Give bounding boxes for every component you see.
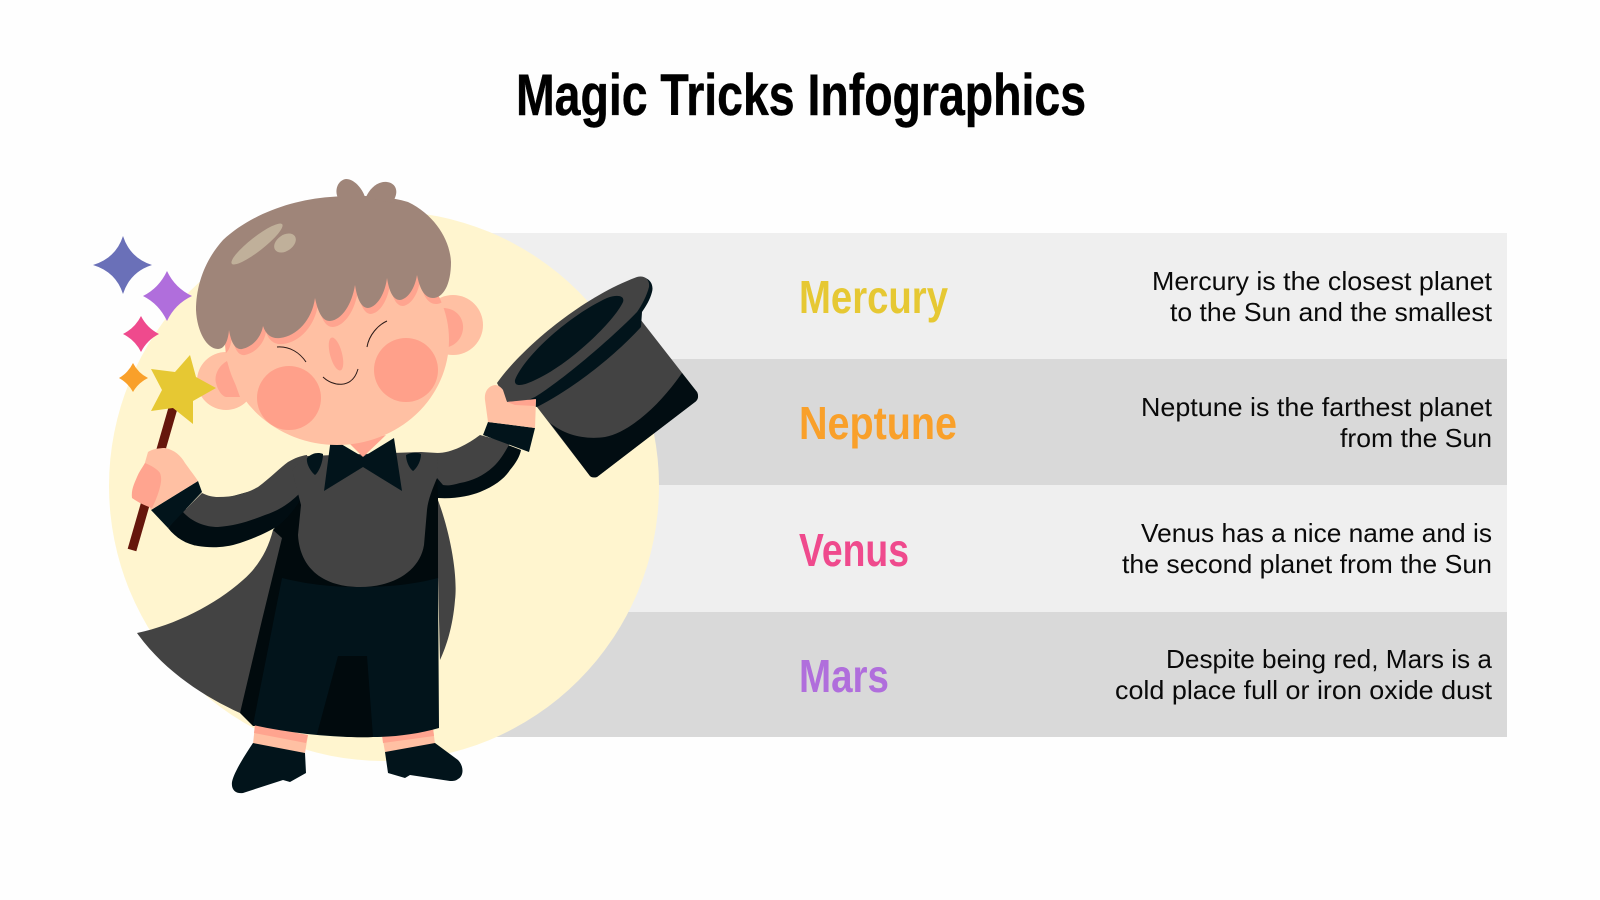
eyes and mouth: [277, 321, 387, 384]
top hat: [497, 277, 698, 477]
wand: [132, 408, 173, 550]
face: [225, 235, 449, 445]
row: Venus: [400, 485, 1507, 612]
row: Mars: cold place full or iron oxide dust: [1115, 675, 1493, 705]
trousers: [253, 578, 439, 737]
collar tips: [307, 453, 421, 475]
row: Mars: [400, 612, 1507, 737]
row: Venus: the second planet from the Sun: [1122, 549, 1492, 579]
left arm: [151, 455, 310, 547]
row: Neptune: Neptune: [799, 397, 957, 449]
nose: [326, 336, 346, 372]
panel: planet rows: [400, 233, 1507, 737]
row: Mercury: to the Sun and the smallest: [1170, 297, 1493, 327]
body shadow: [240, 478, 438, 728]
torso: [292, 452, 438, 587]
icon: sparkles: [93, 236, 192, 392]
cheeks: [257, 338, 438, 430]
row: Mercury: [400, 233, 1507, 359]
hair highlights: [227, 219, 299, 269]
illustration: magician: [132, 179, 698, 793]
shoes: [232, 743, 462, 793]
row: Venus: Venus has a nice name and is: [1141, 518, 1492, 548]
hair: [196, 179, 451, 349]
legs: [253, 725, 435, 753]
row: Mercury: Mercury: [799, 271, 948, 323]
row: Neptune: Neptune is the farthest planet: [1141, 392, 1493, 422]
cape: [137, 495, 456, 713]
left hand: [132, 448, 198, 510]
row: Mercury: Mercury is the closest planet: [1152, 266, 1493, 296]
star: [151, 355, 216, 424]
row: Neptune: [400, 359, 1507, 485]
title: Magic Tricks Infographics: [516, 63, 1086, 128]
yellow circle backdrop: [109, 211, 659, 761]
row: Mars: Despite being red, Mars is a: [1166, 644, 1493, 674]
row: Mars: Mars: [799, 650, 889, 702]
bow tie: [324, 438, 402, 491]
hair shadow: [225, 276, 442, 355]
row: Neptune: from the Sun: [1340, 423, 1492, 453]
ears: [197, 295, 483, 410]
neck: [349, 435, 386, 457]
right arm: [430, 422, 535, 498]
right hand: [485, 385, 536, 428]
row: Venus: Venus: [799, 524, 909, 576]
